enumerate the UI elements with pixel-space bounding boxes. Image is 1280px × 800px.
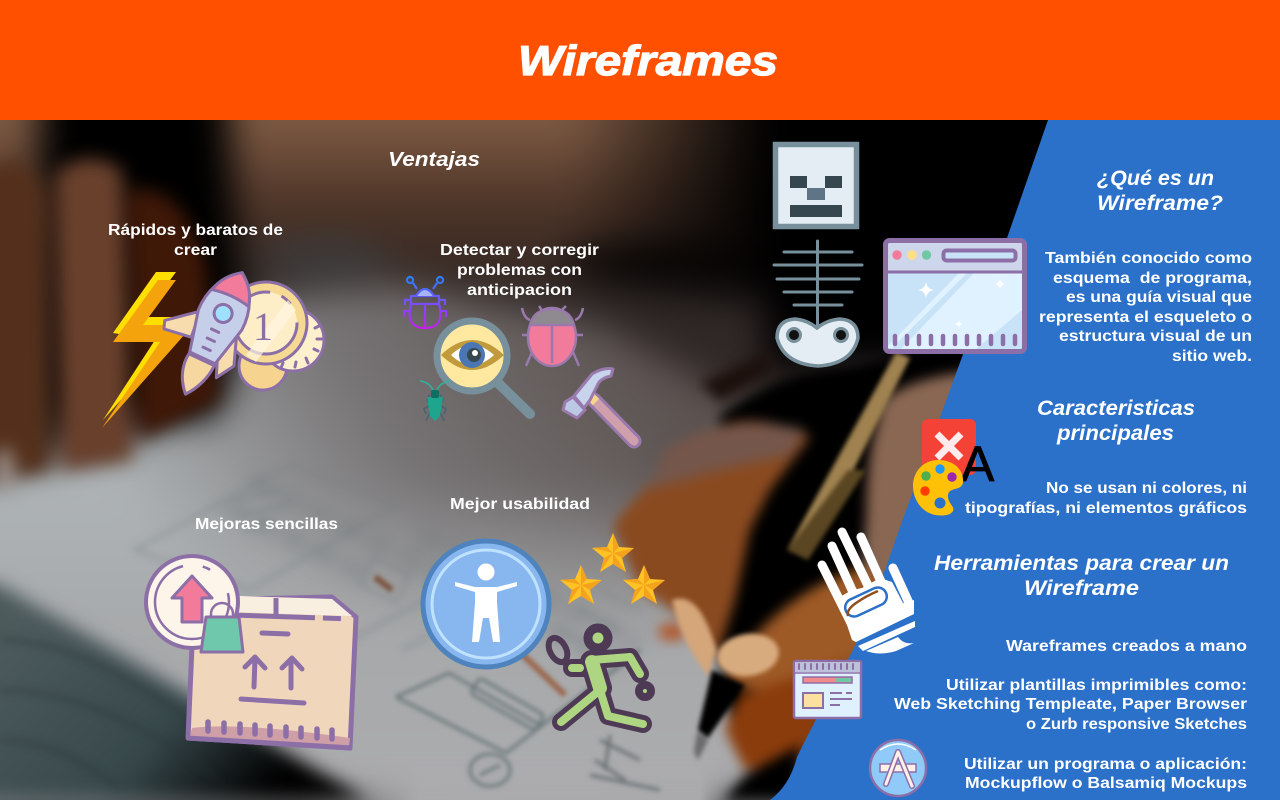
icon: cardboard box <box>187 596 356 748</box>
icon: coins: 1 <box>253 304 273 349</box>
label: Rápidos y baratos de crear: crear <box>174 242 217 259</box>
label: Rápidos y baratos de crear: Rápidos y baratos de <box>108 222 283 239</box>
icon: hammer <box>563 369 634 441</box>
text: hand-drawn: Wareframes creados a mano <box>1006 638 1247 655</box>
heading: Caracteristicas principales <box>1037 397 1195 445</box>
text: printable templates <box>894 677 1247 733</box>
icon: pink bug <box>522 306 583 366</box>
icon: lightning bolt <box>102 272 195 428</box>
icon: magnifier with eye <box>437 321 530 414</box>
icon: three stars <box>560 533 665 604</box>
text: apps: Mockupflow o Balsamiq Mockups <box>965 775 1247 792</box>
label: Mejoras sencillas: Mejoras sencillas <box>195 516 338 533</box>
label: Detectar y corregir problemas con anticipacion: Detectar y corregir <box>440 242 599 259</box>
text: apps <box>964 756 1247 792</box>
label: Detectar y corregir problemas con anticipacion: anticipacion <box>467 282 572 299</box>
label: Detectar y corregir problemas con anticipacion <box>440 242 599 299</box>
text: apps: Utilizar un programa o aplicación: <box>964 756 1247 773</box>
icon: upload circle with shopping bag <box>146 556 243 652</box>
heading: Herramientas para crear un Wireframe: Wireframe <box>1024 577 1139 600</box>
blue info panel <box>770 120 1280 800</box>
heading: ¿Qué es un Wireframe?: Wireframe? <box>1097 192 1223 215</box>
text: definition: representa el esqueleto o <box>1039 309 1252 326</box>
label: Detectar y corregir problemas con anticipacion: problemas con <box>457 262 582 279</box>
heading: Caracteristicas principales: principales <box>1056 422 1174 445</box>
heading: Ventajas: Ventajas <box>388 149 480 171</box>
icon: skeleton <box>774 144 862 366</box>
text: definition: estructura visual de un <box>1059 328 1252 345</box>
icon: purple bug <box>404 277 446 328</box>
icon: browser window <box>885 240 1025 352</box>
label: Rápidos y baratos de crear <box>108 222 283 259</box>
heading: Caracteristicas principales: Caracteristicas <box>1037 397 1195 420</box>
text: no colors note <box>965 480 1247 517</box>
text: no colors note: No se usan ni colores, ni <box>1046 480 1247 497</box>
icon: accessibility badge <box>423 541 549 667</box>
heading: ¿Qué es un Wireframe?: ¿Qué es un <box>1097 167 1214 190</box>
icon: glove hand <box>822 532 915 654</box>
icon: rocket <box>140 252 271 408</box>
text: definition: También conocido como <box>1045 250 1252 267</box>
text: definition: sitio web. <box>1172 348 1252 365</box>
text: printable templates: o Zurb responsive Sketches <box>1026 716 1247 733</box>
header bar <box>0 0 1280 120</box>
heading: Herramientas para crear un Wireframe: Herramientas para crear un <box>934 552 1229 575</box>
text: printable templates: Web Sketching Templeate, Paper Browser <box>894 696 1247 713</box>
label: Mejor usabilidad: Mejor usabilidad <box>450 496 590 513</box>
heading: Herramientas para crear un Wireframe <box>934 552 1229 600</box>
icon: no colors, no fonts: A <box>961 436 995 492</box>
icon: page template <box>794 661 861 718</box>
icon: tennis player <box>545 628 651 724</box>
icon: coins <box>225 282 324 390</box>
text: definition <box>1039 250 1252 365</box>
text: no colors note: tipografías, ni elementos gráficos <box>965 500 1247 517</box>
icon: green beetle <box>420 381 450 421</box>
icon: app store <box>870 740 926 796</box>
text: definition: esquema de programa, <box>1053 270 1252 287</box>
text: definition: es una guía visual que <box>1066 289 1252 306</box>
text: printable templates: Utilizar plantillas imprimibles como: <box>946 677 1247 694</box>
title: Wireframes <box>518 37 778 84</box>
icon: no colors, no fonts <box>913 419 995 516</box>
heading: ¿Qué es un Wireframe? <box>1097 167 1223 215</box>
